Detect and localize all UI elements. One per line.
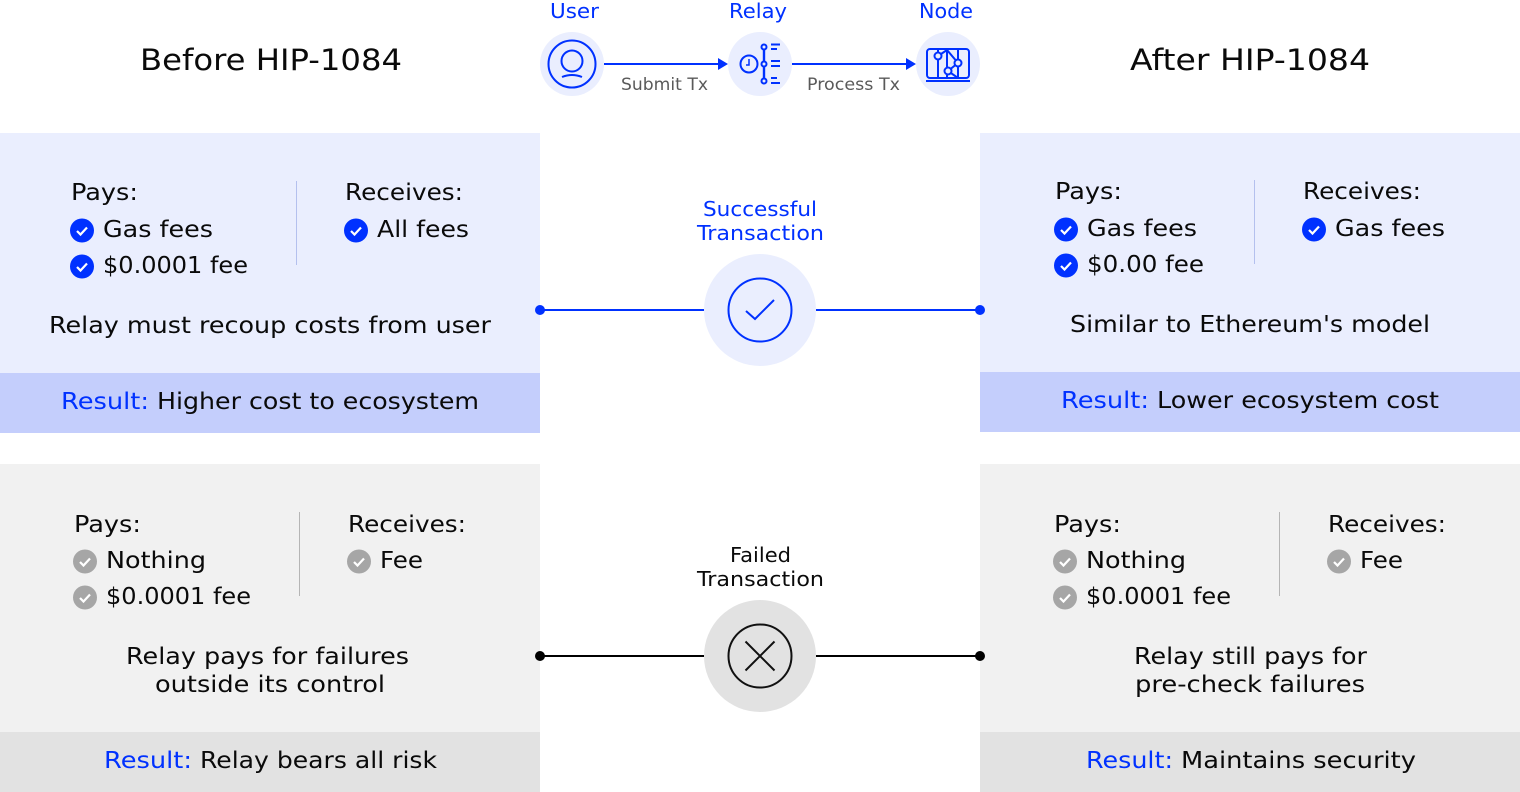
result: Higher cost to ecosystem	[157, 387, 479, 415]
pays list: $0.00 fee	[1087, 250, 1204, 278]
pays list: Gas fees	[103, 215, 213, 243]
pays list: Pays:	[71, 178, 138, 206]
receives list	[344, 178, 469, 243]
label: process tx: Process Tx	[807, 75, 900, 94]
pays list: Nothing	[106, 546, 206, 574]
title: after: After HIP-1084	[1130, 43, 1370, 77]
pays list	[1054, 177, 1204, 278]
receives list: All fees	[377, 215, 469, 243]
icon: failure cross	[704, 600, 816, 712]
label: failed transaction: Failed	[730, 543, 791, 567]
description: outside its control	[155, 670, 385, 698]
receives list: Gas fees	[1335, 214, 1445, 242]
receives list: Receives:	[345, 178, 463, 206]
pays list: $0.0001 fee	[106, 582, 251, 610]
receives list	[1302, 177, 1445, 242]
description	[126, 642, 409, 698]
pays list: Pays:	[1055, 177, 1122, 205]
icon: relay	[728, 32, 792, 96]
description	[1134, 642, 1367, 698]
panel: before, failed	[0, 464, 540, 792]
label: failed transaction	[696, 543, 824, 591]
label: successful transaction: Successful	[703, 197, 817, 221]
result: Result:	[1086, 746, 1173, 774]
description: Similar to Ethereum's model	[1070, 310, 1430, 338]
result	[1061, 386, 1439, 414]
receives list: Fee	[1360, 546, 1403, 574]
pays list: $0.0001 fee	[103, 251, 248, 279]
arrow: process	[792, 58, 916, 70]
pays list	[73, 510, 251, 610]
icon: user	[540, 32, 604, 96]
connector: failed transaction	[535, 651, 985, 661]
arrow: submit	[604, 58, 728, 70]
pays list: Pays:	[1054, 510, 1121, 538]
receives list: Receives:	[1328, 510, 1446, 538]
panel: after, failed	[980, 464, 1520, 792]
description: Relay pays for failures	[126, 642, 409, 670]
pays list	[70, 178, 248, 279]
description: Relay still pays for	[1134, 642, 1367, 670]
title: before: Before HIP-1084	[140, 43, 402, 77]
description: Relay must recoup costs from user	[49, 311, 491, 339]
pays list: $0.0001 fee	[1086, 582, 1231, 610]
pays list: Pays:	[74, 510, 141, 538]
pays list: Nothing	[1086, 546, 1186, 574]
icon: success check	[704, 254, 816, 366]
receives list	[1327, 510, 1446, 574]
receives list: Fee	[380, 546, 423, 574]
result: Lower ecosystem cost	[1157, 386, 1439, 414]
pays list: Gas fees	[1087, 214, 1197, 242]
result: Relay bears all risk	[200, 746, 437, 774]
label: submit tx: Submit Tx	[621, 75, 708, 94]
result	[1086, 746, 1416, 774]
receives list: Receives:	[1303, 177, 1421, 205]
result: Result:	[104, 746, 192, 774]
result: Maintains security	[1181, 746, 1416, 774]
panel: after, successful	[980, 133, 1520, 432]
result	[104, 746, 437, 774]
result: Result:	[61, 387, 149, 415]
panel: before, successful	[0, 133, 540, 433]
label: failed transaction: Transaction	[696, 567, 824, 591]
description: pre-check failures	[1135, 670, 1365, 698]
label: successful transaction	[696, 197, 824, 245]
flow diagram: user to relay to node	[540, 0, 980, 96]
receives list	[347, 510, 466, 574]
icon: node	[916, 32, 980, 96]
connector: successful transaction	[535, 305, 985, 315]
pays list	[1053, 510, 1231, 610]
receives list: Receives:	[348, 510, 466, 538]
result: Result:	[1061, 386, 1149, 414]
label: successful transaction: Transaction	[696, 221, 824, 245]
